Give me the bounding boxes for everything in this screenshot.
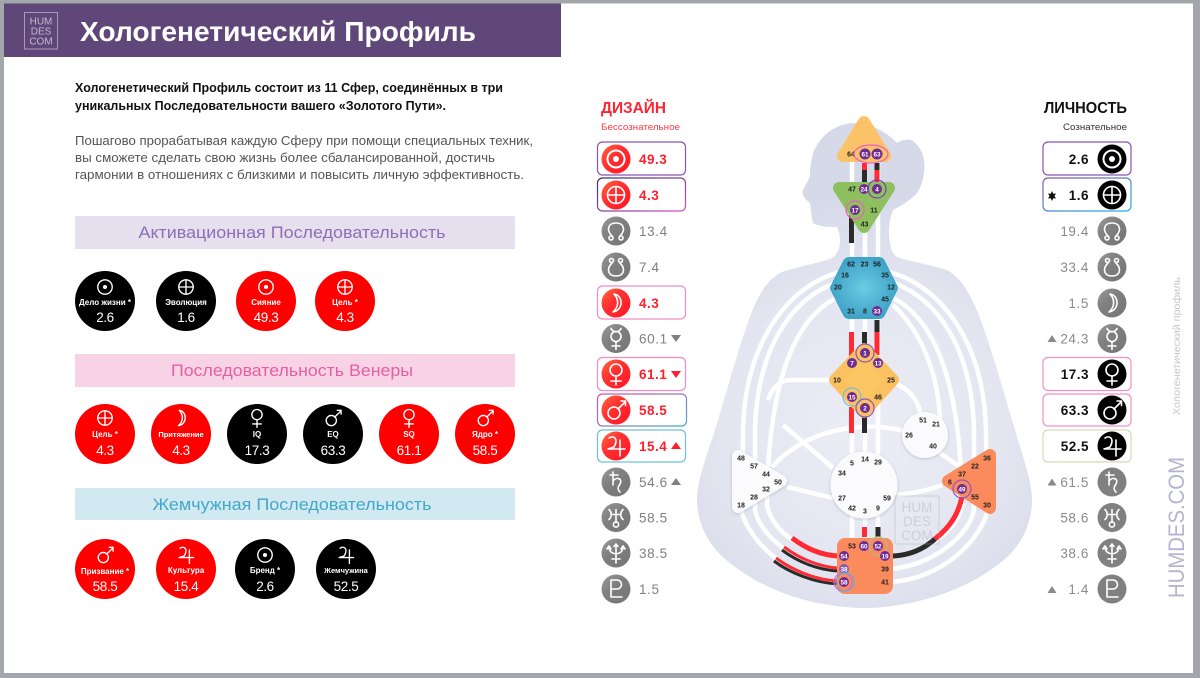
sphere: Сияние (236, 271, 296, 331)
center: ego: 51 (919, 418, 927, 424)
sphere: Ядро: Ядро * (472, 430, 499, 439)
center: root: 53 (848, 544, 856, 550)
sphere: Ядро: 58.5 (473, 443, 497, 458)
design row: venus: 61.1 (639, 367, 667, 382)
sphere: Цель (Venus): Цель * (92, 430, 119, 439)
sphere: Культура: Культура (168, 566, 205, 575)
center: throat: 33 (873, 308, 881, 316)
center: root: 39 (881, 566, 889, 574)
center: G: 13 (874, 360, 882, 368)
sphere: IQ (227, 404, 287, 464)
center: solar: 42 (848, 506, 856, 512)
personality row: earth (1043, 178, 1131, 211)
center: solar (830, 452, 898, 518)
center: G: 2 (863, 406, 867, 412)
watermark: COM (901, 528, 933, 543)
design row: neptune: 38.5 (639, 546, 668, 561)
personality row: sun: 2.6 (1069, 152, 1089, 167)
personality row: south node: 33.4 (1060, 260, 1089, 275)
center: head: 64 (847, 152, 855, 158)
sphere: Призвание: Призвание * (81, 567, 130, 576)
center: throat: 31 (847, 308, 855, 316)
center: throat: 35 (881, 272, 889, 280)
personality row: uranus (1060, 503, 1126, 532)
design row: uranus: 58.5 (639, 510, 668, 526)
heading: design column: Бессознательное (601, 122, 680, 133)
center: solar: 27 (838, 496, 846, 502)
design row: pluto: 1.5 (639, 582, 660, 597)
sphere: Цель (315, 271, 375, 331)
vertical caption: Хологенетический профиль (1171, 276, 1183, 415)
personality row: sun (1043, 142, 1131, 175)
header band (4, 4, 561, 57)
sphere: Призвание (75, 539, 135, 599)
center: root: 38 (840, 566, 848, 574)
sphere: Дело жизни: Дело жизни * (79, 298, 132, 307)
center: head (843, 122, 888, 163)
heading: activation sequence (75, 216, 515, 249)
body graph (697, 122, 1032, 608)
center: ajna: 17 (851, 208, 859, 214)
center: throat (830, 257, 898, 319)
center: spleen triangle: 50 (774, 480, 782, 486)
center: root: 60 (860, 544, 868, 550)
heading: Venus sequence (75, 354, 515, 387)
design row: jupiter: 15.4 (639, 439, 667, 454)
personality row: venus (1043, 358, 1131, 390)
sphere: Бренд: 2.6 (256, 579, 274, 594)
center: solar: 34 (838, 470, 846, 478)
heading: personality column (1044, 100, 1127, 133)
center: spleen triangle: 57 (750, 464, 758, 470)
sphere: Жемчужина (316, 539, 376, 599)
sphere: Цель (Venus) (75, 404, 135, 464)
center: emotions triangle: 37 (958, 472, 966, 478)
sphere: Дело жизни: 2.6 (96, 310, 114, 325)
sphere: EQ: 63.3 (321, 443, 345, 458)
center: ego: 40 (929, 444, 937, 450)
center: root: 41 (881, 580, 889, 586)
center: root: 54 (840, 554, 848, 560)
personality row: pluto (1048, 574, 1126, 604)
design row: mercury (602, 324, 681, 353)
center: throat: 23 (861, 262, 868, 268)
heading: design column (601, 99, 680, 133)
intro text (75, 81, 533, 182)
center: G (833, 344, 895, 417)
design planets list (598, 142, 686, 604)
activated channels (774, 163, 962, 584)
personality row: mars (1043, 394, 1131, 426)
center: emotions triangle: 30 (983, 502, 991, 510)
heading: personality column: ЛИЧНОСТЬ (1044, 100, 1127, 117)
center: throat: 8 (863, 308, 867, 316)
sphere: IQ: IQ (253, 430, 261, 439)
sphere: SQ: SQ (403, 430, 415, 439)
center: spleen triangle: 44 (762, 472, 770, 478)
watermark (895, 496, 939, 544)
center: emotions triangle: 49 (958, 486, 966, 494)
design row: mercury: 60.1 (639, 332, 668, 346)
design row: mars (598, 394, 686, 426)
personality row: south node (1060, 252, 1126, 282)
personality row: neptune: 38.6 (1060, 546, 1089, 561)
logo: HUM (30, 16, 52, 28)
sphere: Культура: 15.4 (174, 579, 199, 594)
design row: jupiter (598, 430, 686, 462)
sphere: Цель: 4.3 (336, 310, 354, 325)
center: throat: 16 (841, 272, 849, 280)
center: ego: 26 (905, 432, 913, 440)
center: emotions triangle: 6 (948, 480, 952, 486)
personality row: moon (1068, 288, 1126, 318)
intro text: Хологенетический Профиль состоит из 11 Сфер, соединённых в три (75, 81, 503, 95)
center: spleen triangle: 18 (737, 502, 745, 510)
sphere: Эволюция: Эволюция (165, 298, 207, 307)
sphere: Призвание: 58.5 (93, 579, 117, 594)
center: solar: 14 (861, 456, 869, 464)
sphere: SQ: 61.1 (397, 443, 421, 458)
sphere: Эволюция (156, 271, 216, 331)
sphere: SQ (379, 404, 439, 464)
design row: earth: 4.3 (639, 188, 659, 203)
sphere: Сияние: 49.3 (254, 310, 278, 325)
sphere: Притяжение: 4.3 (172, 443, 190, 458)
center: spleen triangle (737, 456, 782, 510)
heading: Venus sequence: Последовательность Венеры (171, 362, 413, 380)
design row: sun (598, 142, 686, 175)
design row: neptune (602, 538, 668, 568)
center: root: 52 (874, 544, 882, 550)
heading: activation sequence: Активационная Последовательность (138, 224, 446, 242)
intro text: Пошагово прорабатывая каждую Сферу при помощи специальных техник, (75, 134, 533, 148)
title: Хологенетический Профиль (80, 16, 476, 47)
design row: moon (598, 286, 686, 319)
design row: moon: 4.3 (639, 296, 659, 311)
design row: venus (598, 358, 686, 390)
center: throat: 62 (847, 262, 855, 268)
center: ajna: 47 (848, 186, 856, 194)
white channels (742, 162, 987, 582)
design row: saturn: 54.6 (639, 475, 668, 490)
logo (24, 12, 58, 49)
sphere: Культура (156, 539, 216, 599)
design row: saturn (602, 468, 681, 496)
watermark: DES (903, 514, 931, 529)
center: ajna: 11 (870, 208, 878, 214)
center: ajna: 43 (861, 222, 868, 228)
personality row: mercury: 24.3 (1060, 332, 1089, 346)
body silhouette (697, 123, 1032, 608)
center: solar: 3 (863, 508, 867, 516)
personality row: moon: 1.5 (1068, 296, 1089, 311)
logo: COM (29, 36, 53, 48)
personality row: north node (1060, 216, 1126, 246)
center: ajna (839, 180, 889, 228)
sphere: Жемчужина: 52.5 (334, 579, 358, 594)
design row: north node: 13.4 (639, 224, 668, 239)
personality planets list (1043, 142, 1131, 604)
center: throat: 45 (881, 296, 889, 304)
logo: DES (31, 26, 52, 38)
personality row: mars: 63.3 (1061, 403, 1089, 418)
center: G: 7 (850, 360, 854, 368)
heading: design column: ДИЗАЙН (601, 99, 666, 117)
design row: mars: 58.5 (639, 403, 667, 418)
center: head: 63 (873, 152, 881, 158)
vertical brand: HUMDES.COM (1164, 457, 1189, 598)
sphere: Цель: Цель * (332, 298, 359, 307)
sphere: Притяжение: Притяжение (158, 430, 204, 439)
personality row: mercury (1048, 324, 1126, 353)
center: solar: 9 (876, 506, 880, 512)
personality row: saturn: 61.5 (1060, 475, 1089, 490)
center: throat: 56 (873, 262, 881, 268)
design row: north node (602, 216, 668, 246)
personality row: neptune (1060, 538, 1126, 568)
heading: personality column: Сознательное (1063, 122, 1127, 133)
center: throat: 20 (834, 284, 842, 292)
center: ajna: 24 (860, 186, 868, 194)
design row: earth (598, 178, 686, 211)
center: spleen triangle: 28 (750, 494, 758, 502)
sphere: Бренд (235, 539, 295, 599)
sphere: Ядро (455, 404, 515, 464)
center: spleen triangle: 48 (737, 456, 745, 462)
sphere: Жемчужина: Жемчужина (323, 566, 369, 575)
center: G: 15 (848, 394, 856, 402)
intro text: гармонии в отношениях с близкими и повысить личную эффективность. (75, 168, 524, 182)
center: ego (902, 412, 948, 458)
design row: uranus (602, 503, 668, 532)
personality row: north node: 19.4 (1060, 224, 1089, 239)
center: G: 46 (874, 394, 882, 402)
personality row: jupiter (1043, 430, 1131, 462)
design row: south node (602, 252, 660, 282)
design row: pluto (602, 574, 660, 604)
personality row: uranus: 58.6 (1060, 510, 1089, 526)
center: head: 61 (861, 152, 869, 158)
heading: pearl sequence: Жемчужная Последовательность (152, 496, 432, 514)
personality row: venus: 17.3 (1061, 367, 1089, 382)
personality row: jupiter: 52.5 (1061, 439, 1089, 454)
center: solar: 59 (883, 496, 891, 502)
center: root (834, 537, 893, 594)
personality row: saturn (1048, 468, 1126, 496)
center: solar: 5 (850, 460, 854, 468)
intro text: уникальных Последовательности вашего «Золотого Пути». (75, 99, 446, 113)
center: emotions triangle: 55 (971, 494, 979, 502)
center: emotions triangle (948, 455, 991, 510)
sphere: EQ: EQ (327, 430, 339, 439)
center: ego: 21 (932, 422, 940, 428)
sphere: Эволюция: 1.6 (177, 310, 195, 325)
personality row: earth: 1.6 (1069, 188, 1089, 203)
intro text: вы сможете сделать свою жизнь более сбалансированной, достичь (75, 151, 495, 165)
sphere: IQ: 17.3 (245, 443, 269, 458)
sphere: Бренд: Бренд * (250, 566, 281, 575)
watermark: HUM (902, 500, 932, 515)
sphere: EQ (303, 404, 363, 464)
center: root: 19 (881, 554, 889, 560)
center: ajna: 4 (875, 186, 879, 194)
center: emotions triangle: 22 (971, 464, 979, 470)
sphere: Дело жизни (75, 271, 135, 331)
center: solar: 29 (874, 460, 882, 466)
sphere: Цель (Venus): 4.3 (96, 443, 114, 458)
center: throat: 12 (887, 284, 895, 292)
sphere: Сияние: Сияние (251, 298, 281, 307)
center: root: 58 (840, 580, 848, 586)
center: G: 25 (887, 378, 895, 384)
center: G: 1 (863, 350, 867, 358)
design row: sun: 49.3 (639, 152, 667, 167)
center: emotions triangle: 36 (983, 456, 991, 462)
center: spleen triangle: 32 (762, 486, 770, 494)
personality row: pluto: 1.4 (1068, 582, 1089, 597)
design row: south node: 7.4 (639, 260, 660, 275)
heading: pearl sequence (75, 488, 515, 520)
center: G: 10 (833, 378, 841, 384)
sphere: Притяжение (151, 404, 211, 464)
